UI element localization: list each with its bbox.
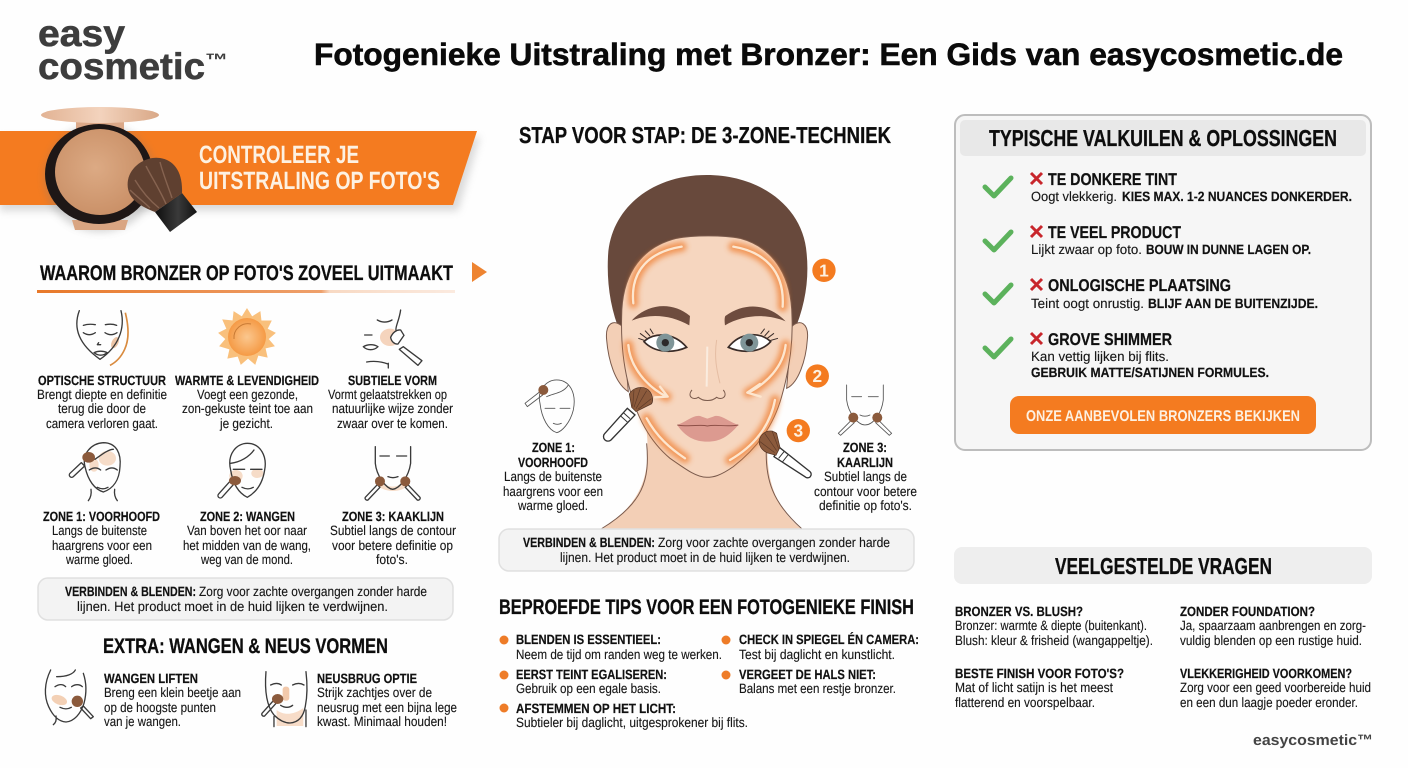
text: optische structuur [37, 373, 167, 431]
text: zone 2 wangen [183, 509, 311, 567]
faq: zonder foundation [1180, 604, 1366, 648]
pitfall: grove shimmer: GROVE SHIMMER [1048, 330, 1172, 349]
callout: verbinden en blenden center: VERBINDEN & BLENDEN: [523, 535, 655, 550]
hair [608, 175, 807, 333]
faq: zonder foundation: Ja, spaarzaam aanbrengen en zorg- [1180, 618, 1366, 633]
text: wangen liften: Breng een klein beetje aan [104, 685, 241, 700]
faq: zonder foundation: ZONDER FOUNDATION? [1180, 604, 1315, 619]
arrow: heading pointer [472, 262, 487, 282]
text: zone 3 kaaklijn: Subtiel langs de contour [330, 523, 456, 538]
ears [606, 323, 808, 392]
faq: bronzer vs blush: Bronzer: warmte & diepte (buitenkant). [955, 618, 1147, 633]
pitfall: grove shimmer: GEBRUIK MATTE/SATIJNEN FORMULES. [1031, 365, 1269, 380]
text: face zone 1 label: VOORHOOFD [518, 455, 588, 470]
text: subtiele vorm: Vormt gelaatstrekken op [328, 387, 447, 402]
text: zone 1 voorhoofd [43, 509, 160, 567]
pitfall: onlogische plaatsing: Teint oogt onrustig. [1031, 296, 1144, 311]
icon: optische structuur face [77, 311, 128, 365]
callout: verbinden en blenden center: Zorg voor zachte overgangen zonder harde [658, 535, 890, 550]
heading: waarom bronzer [37, 262, 455, 293]
tip: blenden: BLENDEN IS ESSENTIEEL: [516, 632, 661, 647]
faq: bronzer vs blush [955, 604, 1153, 648]
callout: verbinden en blenden center: lijnen. Het product moet in de huid lijken te verdwijnen. [560, 550, 850, 565]
text: optische structuur: terug die door de [58, 401, 146, 416]
pitfall: onlogische plaatsing: ONLOGISCHE PLAATSING [1048, 276, 1231, 295]
text: subtiele vorm: zwaar over te komen. [337, 416, 448, 431]
logo [38, 13, 228, 87]
text: zone 3 kaaklijn [330, 509, 456, 567]
tip: egaliseren: EERST TEINT EGALISEREN: [516, 667, 667, 682]
icon: subtiele vorm brush [363, 310, 422, 368]
text: warmte en levendigheid: WARMTE & LEVENDIGHEID [175, 373, 319, 388]
text: wangen liften [104, 671, 241, 729]
text: warmte en levendigheid: Voegt een gezonde, [197, 387, 298, 402]
faq: vlekkerigheid voorkomen [1180, 666, 1371, 710]
text: wangen liften: op de hoogste punten [104, 700, 216, 715]
number badges: 3 [793, 421, 803, 441]
pitfall: te donkere tint: TE DONKERE TINT [1048, 170, 1178, 189]
icon: wangen liften face [45, 670, 93, 725]
banner: controleer je uitstraling [0, 107, 480, 232]
callout: verbinden en blenden left: VERBINDEN & BLENDEN: [65, 584, 196, 599]
number badges: 2 [812, 367, 822, 386]
pitfall: te veel product: Lijkt zwaar op foto. [1031, 242, 1142, 257]
faq: vlekkerigheid voorkomen: Zorg voor een geed voorbereide huid [1180, 680, 1371, 695]
tip: blenden: Neem de tijd om randen weg te werken. [516, 647, 722, 662]
banner text: UITSTRALING OP FOTO'S [199, 167, 440, 195]
icon: zone 3 mini face [365, 447, 420, 500]
text: zone 2 wangen: Van boven het oor naar [187, 523, 307, 538]
callout: verbinden en blenden left [38, 578, 453, 620]
heading: veelgestelde vragen [954, 547, 1372, 584]
callout: verbinden en blenden left: lijnen. Het product moet in de huid lijken te verdwijnen. [77, 599, 388, 614]
lips [677, 416, 738, 442]
zone strokes [628, 247, 786, 460]
tip: licht: AFSTEMMEN OP HET LICHT: [516, 701, 676, 716]
text: warmte en levendigheid [175, 373, 319, 431]
faq: bronzer vs blush: Blush: kleur & frisheid (wangappeltje). [955, 633, 1153, 648]
faq: vlekkerigheid voorkomen: VLEKKERIGHEID VOORKOMEN? [1180, 666, 1352, 681]
pitfall: grove shimmer: Kan vettig lijken bij flits. [1031, 349, 1169, 364]
icon: neusbrug optie face [262, 672, 307, 727]
text: face zone 3 label: Subtiel langs de [824, 469, 907, 484]
tip: licht [500, 701, 748, 730]
tip: hals [722, 667, 896, 696]
logo: cosmetic [38, 46, 205, 87]
faq: beste finish: Mat of licht satijn is het meest [955, 680, 1113, 695]
text: zone 1 voorhoofd: haargrens voor een [52, 538, 152, 553]
number badges: 1 [819, 261, 829, 280]
pitfall: onlogische plaatsing [1031, 276, 1318, 311]
icon: zone 1 mini face [69, 443, 120, 501]
eyes [638, 329, 778, 352]
icon: red crosses [1031, 173, 1042, 344]
faq: vlekkerigheid voorkomen: en een dun laagje poeder eronder. [1180, 695, 1358, 710]
text: face zone 1 label: ZONE 1: [532, 440, 575, 455]
faq: beste finish: BESTE FINISH VOOR FOTO'S? [955, 666, 1124, 681]
tip: licht: Subtieler bij daglicht, uitgesprokener bij flits. [516, 715, 748, 730]
text: optische structuur: Brengt diepte en definitie [37, 387, 167, 402]
tip: spiegel en camera: CHECK IN SPIEGEL ÉN CAMERA: [739, 632, 919, 647]
text: warmte en levendigheid: je gezicht. [219, 416, 273, 431]
text: face zone 1 label: Langs de buitenste [504, 469, 602, 484]
tip: egaliseren: Gebruik op een egale basis. [516, 681, 661, 696]
pitfall: te donkere tint: KIES MAX. 1-2 NUANCES DONKERDER. [1122, 189, 1352, 204]
text: face zone 1 label [503, 440, 603, 513]
footer logo: easycosmetic™ [1253, 732, 1373, 749]
text: zone 2 wangen: ZONE 2: WANGEN [200, 509, 295, 524]
icon: mini zone 1 [525, 380, 574, 433]
text: subtiele vorm: SUBTIELE VORM [348, 373, 437, 388]
faq: zonder foundation: vuldig blenden op een rustige huid. [1180, 633, 1362, 648]
text: face zone 3 label: KAARLIJN [837, 455, 893, 470]
pitfall: te donkere tint [1031, 170, 1352, 204]
text: zone 1 voorhoofd: Langs de buitenste [52, 523, 147, 538]
banner text: CONTROLEER JE [199, 141, 359, 169]
logo: ™ [205, 50, 228, 70]
text: neusbrug optie: Strijk zachtjes over de [317, 685, 432, 700]
text: neusbrug optie: neusrug met een bijna lege [317, 700, 457, 715]
icon: zone 2 mini face [218, 443, 265, 498]
pitfall: te veel product: BOUW IN DUNNE LAGEN OP. [1146, 242, 1311, 257]
text: neusbrug optie [317, 671, 457, 729]
heading: extra wangen en neus: EXTRA: WANGEN & NEUS VORMEN [103, 635, 388, 658]
icon: bronzer compact and brush [41, 107, 197, 232]
neck [602, 430, 802, 529]
icon: left brush [604, 387, 653, 441]
pitfall: grove shimmer [1031, 330, 1269, 380]
faq: beste finish: flatterend en voorspelbaar. [955, 695, 1095, 710]
logo: easy [38, 13, 125, 54]
callout: verbinden en blenden center [499, 529, 914, 571]
heading: beproefde tips: BEPROEFDE TIPS VOOR EEN FOTOGENIEKE FINISH [499, 596, 914, 619]
text: optische structuur: OPTISCHE STRUCTUUR [38, 373, 166, 388]
heading: veelgestelde vragen: VEELGESTELDE VRAGEN [1055, 553, 1272, 579]
text: wangen liften: van je wangen. [104, 714, 181, 729]
banner text [199, 141, 440, 195]
callout: verbinden en blenden left: Zorg voor zachte overgangen zonder harde [199, 584, 427, 599]
button: aanbevolen bronzers [1010, 396, 1316, 434]
text: subtiele vorm: natuurlijke wijze zonder [332, 401, 453, 416]
bronzer glow [628, 247, 786, 460]
text: zone 3 kaaklijn: foto's. [376, 552, 408, 567]
panel: typische valkuilen [955, 115, 1371, 450]
text: neusbrug optie: kwast. Minimaal houden! [317, 714, 447, 729]
icon: sun warmth [219, 309, 275, 364]
faq: bronzer vs blush: BRONZER VS. BLUSH? [955, 604, 1083, 619]
text: zone 3 kaaklijn: ZONE 3: KAAKLIJN [342, 509, 444, 524]
tip: spiegel en camera [722, 632, 919, 662]
text: face zone 1 label: haargrens voor een [503, 484, 603, 499]
heading: 3-zone-techniek: STAP VOOR STAP: DE 3-ZONE-TECHNIEK [519, 122, 891, 148]
text: neusbrug optie: NEUSBRUG OPTIE [317, 671, 417, 686]
text: zone 2 wangen: het midden van de wang, [183, 538, 311, 553]
text: face zone 3 label: ZONE 3: [843, 440, 887, 455]
text: face zone 1 label: warme gloed. [517, 498, 588, 513]
heading: waarom bronzer: WAAROM BRONZER OP FOTO'S ZOVEEL UITMAAKT [40, 262, 453, 285]
text: optische structuur: camera verloren gaat. [46, 416, 158, 431]
faq: beste finish [955, 666, 1124, 710]
text: zone 2 wangen: weg van de mond. [200, 552, 293, 567]
icon: mini zone 3 [838, 385, 892, 435]
text: face zone 3 label [814, 440, 917, 513]
icon: green checks [985, 178, 1011, 357]
title: Fotogenieke Uitstraling met Bronzer: Een Gids van easycosmetic.de [314, 37, 1343, 72]
pitfall: te donkere tint: Oogt vlekkerig. [1031, 189, 1117, 204]
tip: blenden [500, 632, 722, 662]
nose [690, 340, 725, 401]
text: zone 1 voorhoofd: warme gloed. [65, 552, 133, 567]
pitfall: onlogische plaatsing: BLIJF AAN DE BUITENZIJDE. [1148, 296, 1318, 311]
text: face zone 3 label: contour voor betere [814, 484, 917, 499]
face skin [622, 236, 792, 477]
text: subtiele vorm [328, 373, 453, 431]
pitfall: te veel product: TE VEEL PRODUCT [1048, 223, 1182, 242]
tip: hals: Balans met een restje bronzer. [739, 681, 896, 696]
eyebrows [632, 306, 786, 325]
text: face zone 3 label: definitie op foto's. [819, 498, 912, 513]
text: warmte en levendigheid: zon-gekuste teint toe aan [182, 401, 313, 416]
text: wangen liften: WANGEN LIFTEN [104, 671, 198, 686]
tip: spiegel en camera: Test bij daglicht en kunstlicht. [739, 647, 895, 662]
chart: face diagram with zones [525, 175, 892, 529]
icon: right brush [759, 431, 811, 478]
text: zone 3 kaaklijn: voor betere definitie op [332, 538, 453, 553]
text: zone 1 voorhoofd: ZONE 1: VOORHOOFD [43, 509, 160, 524]
tip: egaliseren [500, 667, 667, 696]
pitfall: te veel product [1031, 223, 1311, 257]
number badges [787, 259, 836, 442]
tip: hals: VERGEET DE HALS NIET: [739, 667, 876, 682]
button: aanbevolen bronzers: ONZE AANBEVOLEN BRONZERS BEKIJKEN [1026, 408, 1300, 425]
